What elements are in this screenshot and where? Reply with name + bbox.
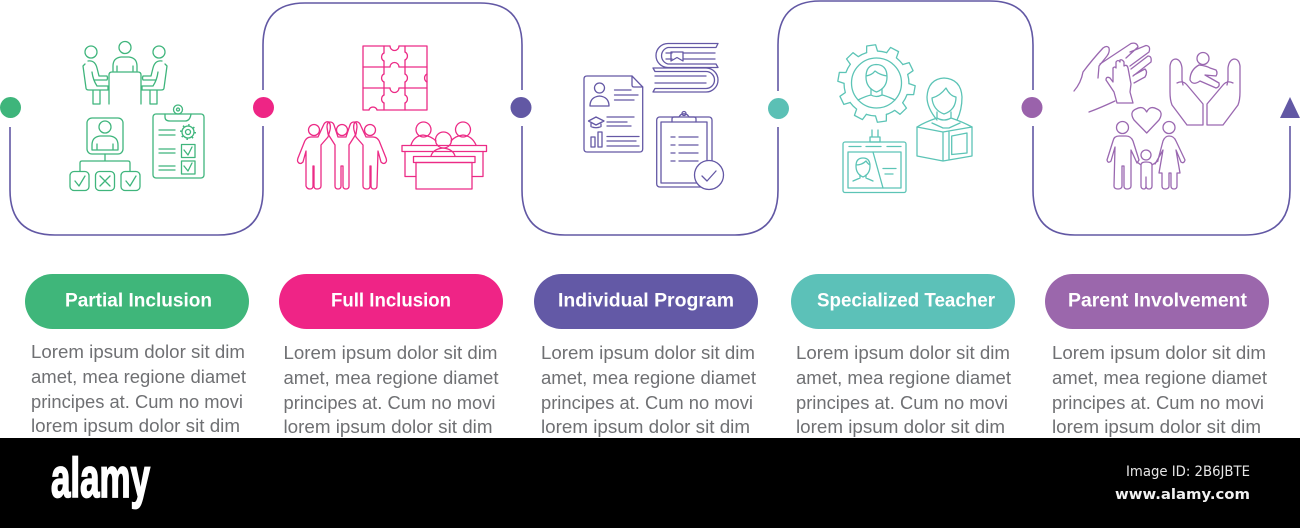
icon: puzzle bbox=[363, 46, 427, 110]
label pill bbox=[25, 274, 249, 329]
icon: adult and child hands bbox=[1074, 43, 1151, 112]
label pill bbox=[1045, 274, 1269, 329]
description: lorem ipsum dolor sit dim bbox=[31, 415, 240, 436]
description: principes at. Cum no movi bbox=[1052, 392, 1264, 413]
description: principes at. Cum no movi bbox=[541, 392, 753, 413]
description: Lorem ipsum dolor sit dim bbox=[1052, 342, 1266, 363]
icon group: partial inclusion bbox=[70, 42, 204, 190]
column: specialized teacher bbox=[791, 274, 1015, 437]
pill title: Specialized Teacher bbox=[817, 290, 996, 312]
icon group: specialized teacher bbox=[830, 39, 972, 192]
label pill bbox=[791, 274, 1015, 329]
icon group: individual program bbox=[584, 44, 724, 190]
pill title: Parent Involvement bbox=[1068, 290, 1248, 312]
icon: hands holding baby bbox=[1170, 52, 1240, 125]
description: principes at. Cum no movi bbox=[796, 392, 1008, 413]
image id: Image ID: 2B6JBTE bbox=[1126, 464, 1250, 480]
website: www.alamy.com bbox=[1115, 487, 1250, 503]
timeline connector line bbox=[10, 1, 1290, 235]
description: Lorem ipsum dolor sit dim bbox=[541, 342, 755, 363]
description: amet, mea regione diamet bbox=[541, 367, 756, 388]
icon: three people cheering bbox=[298, 122, 386, 189]
icon: clipboard with check bbox=[657, 112, 724, 190]
pill title: Full Inclusion bbox=[331, 290, 451, 312]
description: lorem ipsum dolor sit dim bbox=[284, 416, 492, 437]
description: lorem ipsum dolor sit dim bbox=[796, 416, 1005, 437]
description bbox=[1052, 342, 1267, 437]
description: Lorem ipsum dolor sit dim bbox=[31, 341, 245, 362]
icon: books bbox=[653, 44, 718, 92]
description: amet, mea regione diamet bbox=[284, 367, 498, 388]
icon: resume document bbox=[584, 76, 643, 152]
column: partial inclusion bbox=[25, 274, 249, 436]
description bbox=[31, 341, 246, 436]
description: lorem ipsum dolor sit dim bbox=[541, 416, 750, 437]
column: full inclusion bbox=[279, 274, 503, 437]
description bbox=[796, 342, 1011, 437]
description: lorem ipsum dolor sit dim bbox=[1052, 416, 1261, 437]
alamy logo: alamy bbox=[51, 446, 150, 509]
description: Lorem ipsum dolor sit dim bbox=[796, 342, 1010, 363]
icon group: full inclusion bbox=[298, 46, 486, 189]
column: parent involvement bbox=[1045, 274, 1269, 437]
icon: woman reading bbox=[917, 78, 972, 161]
timeline markers bbox=[0, 97, 1300, 119]
icon: gear with person bbox=[830, 39, 923, 128]
description bbox=[541, 342, 756, 437]
column: individual program bbox=[534, 274, 758, 437]
description: principes at. Cum no movi bbox=[284, 392, 496, 413]
description: Lorem ipsum dolor sit dim bbox=[284, 342, 498, 363]
description: amet, mea regione diamet bbox=[796, 367, 1011, 388]
icon group: parent involvement bbox=[1074, 43, 1240, 189]
watermark footer bar bbox=[0, 438, 1300, 528]
icon: family with heart bbox=[1107, 108, 1185, 189]
icon: students at desks bbox=[402, 122, 486, 189]
description: amet, mea regione diamet bbox=[1052, 367, 1267, 388]
pill title: Partial Inclusion bbox=[65, 290, 212, 312]
label pill bbox=[534, 274, 758, 329]
description: amet, mea regione diamet bbox=[31, 366, 246, 387]
icon: ID badge bbox=[843, 130, 906, 192]
description bbox=[284, 342, 498, 437]
label pill bbox=[279, 274, 503, 329]
description: principes at. Cum no movi bbox=[31, 391, 243, 412]
pill title: Individual Program bbox=[558, 290, 734, 312]
